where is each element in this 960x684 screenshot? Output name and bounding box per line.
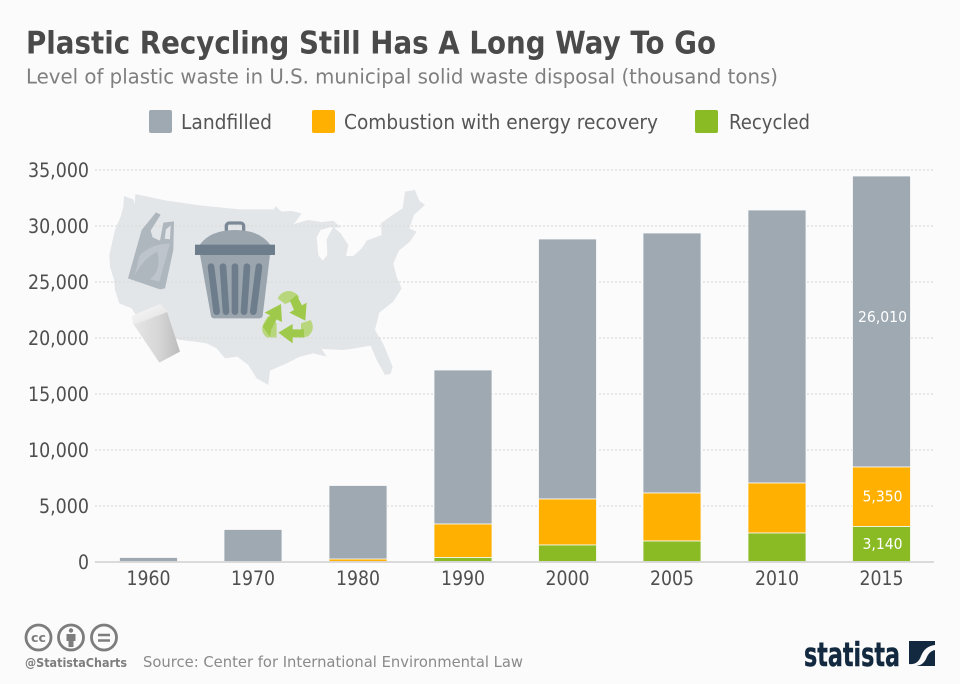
legend: Combustion with energy recovery — [344, 110, 658, 134]
bar 2000 — [538, 239, 596, 562]
x axis labels: 2000 — [546, 567, 590, 590]
y axis labels: 10,000 — [28, 439, 89, 462]
bar 2005 — [643, 233, 701, 562]
y axis labels — [28, 159, 89, 574]
bar 1980 — [329, 486, 387, 562]
stacked bar chart — [120, 176, 910, 562]
value labels: 3,140 — [862, 535, 902, 553]
value labels: 5,350 — [862, 488, 902, 506]
bar 2015 — [852, 176, 910, 562]
y axis labels: 5,000 — [39, 495, 89, 518]
title: Plastic Recycling Still Has A Long Way To Go — [26, 26, 716, 62]
handle: @StatistaCharts — [25, 656, 127, 670]
statista logo: statista — [804, 635, 900, 674]
x axis labels: 1960 — [126, 567, 170, 590]
value labels — [858, 308, 907, 553]
map of the United States — [109, 190, 425, 385]
value labels: 26,010 — [858, 308, 907, 326]
illustration: waste icons — [128, 212, 313, 363]
legend — [149, 110, 810, 134]
x axis labels: 1980 — [336, 567, 380, 590]
bar 2010 — [748, 210, 806, 562]
legend: Recycled — [729, 110, 810, 134]
source: Source: Center for International Environmental Law — [143, 653, 523, 671]
subtitle: Level of plastic waste in U.S. municipal solid waste disposal (thousand tons) — [26, 64, 778, 88]
icon: plastic bag — [128, 212, 174, 289]
y axis labels: 0 — [78, 551, 89, 574]
icon: trash can — [195, 223, 275, 318]
y axis labels: 25,000 — [28, 271, 89, 294]
x axis labels: 2015 — [860, 567, 904, 590]
bar 1990 — [434, 370, 492, 562]
icons: creative commons licence: cc — [31, 630, 46, 645]
icon: recycling arrows — [262, 291, 313, 343]
icon: paper cup — [132, 304, 180, 363]
x axis labels — [126, 567, 904, 590]
bar 1970 — [224, 530, 282, 562]
icons: creative commons licence — [26, 625, 116, 650]
y axis labels: 20,000 — [28, 327, 89, 350]
y axis labels: 30,000 — [28, 215, 89, 238]
x axis labels: 2010 — [755, 567, 799, 590]
y axis labels: 35,000 — [28, 159, 89, 182]
x axis labels: 1970 — [231, 567, 275, 590]
x axis labels: 2005 — [650, 567, 694, 590]
x axis labels: 1990 — [441, 567, 485, 590]
legend: Landfilled — [181, 110, 272, 134]
bar 1960 — [120, 558, 178, 562]
y axis labels: 15,000 — [28, 383, 89, 406]
